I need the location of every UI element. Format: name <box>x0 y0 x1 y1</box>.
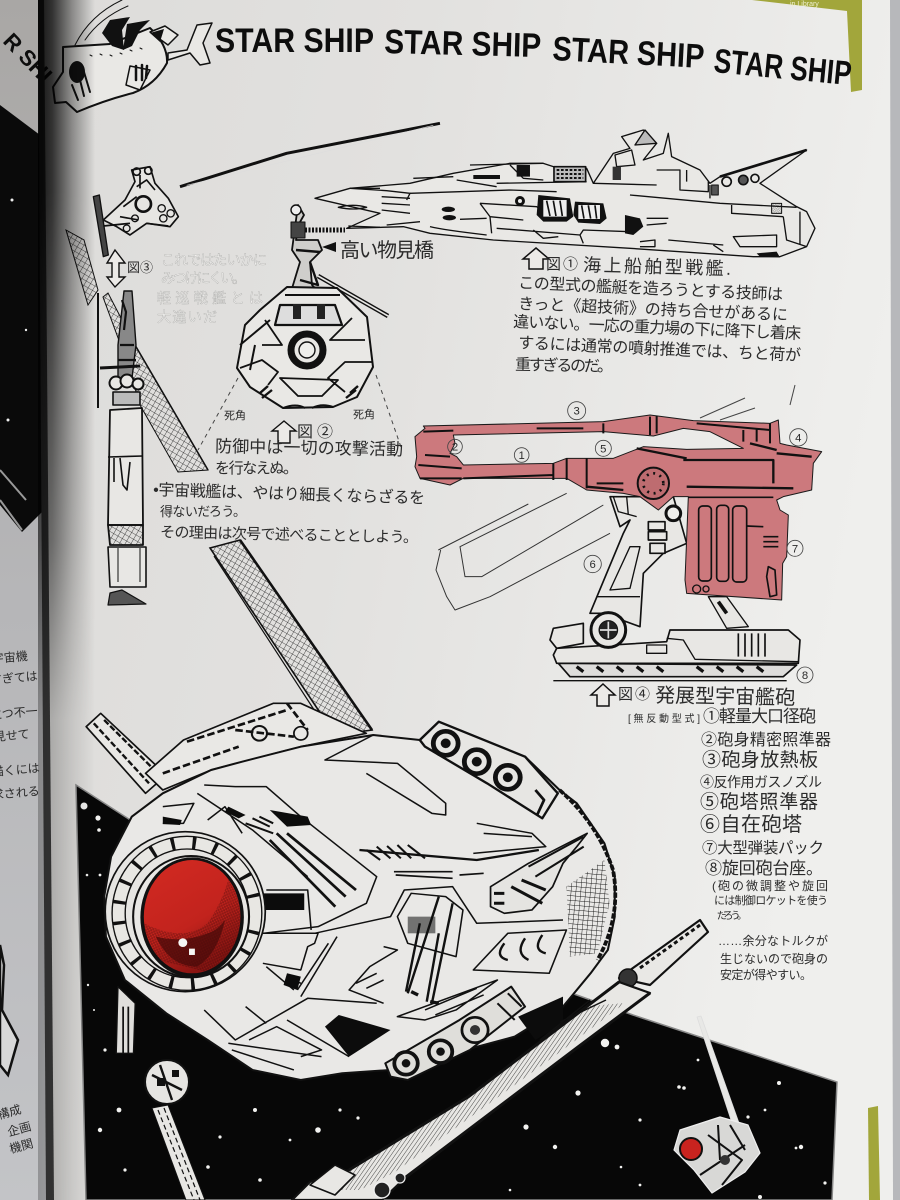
green corner tab <box>752 0 862 92</box>
gun detail lines <box>418 416 812 597</box>
Figure 4: gun turret: 5 <box>600 443 606 455</box>
trunnion <box>638 468 669 499</box>
Figure 4: caption and parts list: (砲の微調整や旋回 <box>712 878 828 893</box>
Figure 4: caption and parts list: ⑥自在砲塔 <box>700 813 802 836</box>
callout: tall lookout bridge: 高い物見橋 <box>340 239 434 262</box>
large hatched dorsal fin <box>210 540 372 735</box>
pink gun body <box>415 415 822 600</box>
blind-angle labels <box>224 408 375 422</box>
Figure 4: caption and parts list: ④反作用ガスノズル <box>700 774 822 790</box>
Figure 3: hatched fin, side view <box>66 230 208 472</box>
Figure 4: caption and parts list: ⑦大型弾装パック <box>702 839 824 857</box>
green lower tab <box>868 1106 880 1200</box>
Figure 2: front view of ship with tall lookout bridge <box>237 205 388 408</box>
Figure 4: gun turret: 8 <box>802 670 808 682</box>
title: repeated STAR SHIP <box>215 22 853 93</box>
small distant ship with red nozzle <box>674 1016 760 1193</box>
left page ship fragment <box>0 945 18 1075</box>
Figure 4: caption and parts list: ⑧旋回砲台座。 <box>705 859 823 878</box>
icon: double arrow <box>107 250 125 287</box>
upper-right gun cluster <box>420 722 558 818</box>
Figure 4: caption and parts list: ③砲身放熱板 <box>702 749 818 771</box>
Figure 1: caption: 重すぎるのだ。 <box>515 356 613 376</box>
Figure 2: caption and body note: その理由は次号で述べることとしよう。 <box>160 524 418 546</box>
Figure 4: gun turret: 6 <box>590 559 596 571</box>
space background panel with stars <box>76 785 837 1200</box>
left page black illustration panel <box>0 105 42 532</box>
Figure 1: caption: 海上船舶型戦艦. <box>583 255 731 279</box>
Figure 3: caption <box>127 252 267 325</box>
Figure 1: caption: 違いない。一応の重力場の下に降下し着床 <box>513 313 801 343</box>
Figure 3: caption: みつけにくい。 <box>161 270 246 286</box>
Figure 2: caption and body note: を行なえぬ。 <box>215 460 298 477</box>
recoil ghost outline <box>436 493 610 610</box>
Figure 3: caption: 軽巡戦艦とは <box>157 290 263 306</box>
Figure 1: long sea-going style warship <box>315 130 815 257</box>
Figure 4: gun turret: 7 <box>792 543 798 555</box>
main spherical battleship <box>86 703 615 1080</box>
title: repeated STAR SHIP: STAR SHIP <box>552 30 705 76</box>
small ghost stroke above gun <box>700 385 795 420</box>
Figure 1: caption: この型式の艦艇を造ろうとする技師は <box>518 274 783 304</box>
title: repeated STAR SHIP: STAR SHIP <box>384 23 542 65</box>
Figure 3: ship seen from the side <box>100 291 146 605</box>
Figure 1: caption: するには通常の噴射推進では、ちと荷が <box>518 334 801 365</box>
Figure 4: caption and parts list: 安定が得やすい。 <box>720 967 812 982</box>
hull <box>104 735 615 1080</box>
right hull turret <box>491 833 587 913</box>
left page handwritten notes: 機関 <box>8 1136 35 1156</box>
Figure 3: caption: 大違いだ <box>157 309 217 325</box>
Figure 4: caption and parts list: ②砲身精密照準器 <box>701 731 831 749</box>
Figure 3: caption: これではたいかに <box>161 252 267 268</box>
dark hull patches <box>163 807 563 1057</box>
turntable base <box>550 623 583 648</box>
left page running title fragment: R SHI <box>0 28 57 88</box>
Figure 4: caption and parts list <box>591 684 831 982</box>
lower-left sphere with strut <box>145 1060 205 1200</box>
blind-angle dashed lines <box>198 375 402 450</box>
Figure 4: caption and parts list: 図④ <box>618 686 650 703</box>
lower gun cluster <box>385 987 525 1080</box>
Figure 1: caption: きっと《超技術》の持ち合せがあるに <box>518 295 788 324</box>
Figure 2: caption and body note: •宇宙戦艦は、やはり細長くならざるを <box>153 480 425 508</box>
Figure 4: caption and parts list: ⑤砲塔照準器 <box>700 791 818 813</box>
Figure 4: gun turret: 1 <box>519 450 525 462</box>
Figure 4: caption and parts list: ①軽量大口径砲 <box>703 707 816 726</box>
Figure 3: ship seen from above with antenna <box>93 123 440 257</box>
right page edge <box>890 0 900 1200</box>
Figure 4: caption and parts list: [無反動型式] <box>628 712 700 725</box>
Figure 3: caption: 図③ <box>127 260 153 275</box>
central hull gun turret <box>408 917 439 1003</box>
left ring around main nozzle <box>105 832 265 992</box>
right rim armour band <box>560 790 615 960</box>
red main nozzle <box>144 860 240 973</box>
green corner tab: ip Library <box>790 1 819 8</box>
lower left landing struts <box>116 987 135 1053</box>
title: repeated STAR SHIP: STAR SHIP <box>712 42 853 93</box>
long diagonal gun strut <box>292 920 708 1200</box>
Figure 2: caption and body note: 防御中は一切の攻撃活動 <box>215 437 403 459</box>
left facing page <box>0 0 50 1200</box>
hull panel lines <box>163 735 566 1070</box>
spine line <box>38 0 54 1200</box>
Figure 1: caption <box>513 248 801 376</box>
Figure 4: caption and parts list: だろう。 <box>717 910 747 922</box>
Figure 2: caption and body note: 得ないだろう。 <box>160 504 246 519</box>
Figure 4: gun turret: 3 <box>574 406 580 418</box>
part number callouts <box>448 402 813 683</box>
turret pedestal arm <box>550 497 800 681</box>
Figure 4: caption and parts list: には制御ロケットを使う <box>714 893 828 907</box>
gutter shadow over spine <box>38 0 98 1200</box>
upper-left struts <box>86 703 366 793</box>
blind-angle labels: 死角 <box>224 409 246 422</box>
left page handwritten notes <box>0 649 40 1156</box>
icon: cartoon fish mascot <box>53 0 212 112</box>
Figure 2: caption and body note: 図② <box>297 423 333 441</box>
Figure 4: caption and parts list: 発展型宇宙艦砲 <box>655 684 795 709</box>
Figure 4: gun turret: 2 <box>452 442 458 454</box>
left page handwritten notes: 企画 <box>6 1119 33 1139</box>
Figure 4: caption and parts list: 生じないので砲身の <box>720 951 828 966</box>
Figure 2: caption and body note <box>153 421 425 546</box>
right side hatching <box>566 860 610 957</box>
title: repeated STAR SHIP: STAR SHIP <box>215 22 374 60</box>
Figure 4: caption and parts list: ……余分なトルクが <box>718 933 828 948</box>
Figure 4: gun turret: 4 <box>795 432 801 444</box>
blind-angle labels: 死角 <box>353 408 375 421</box>
Figure 4: gun turret <box>415 402 822 683</box>
Figure 1: caption: 図① <box>546 256 578 273</box>
